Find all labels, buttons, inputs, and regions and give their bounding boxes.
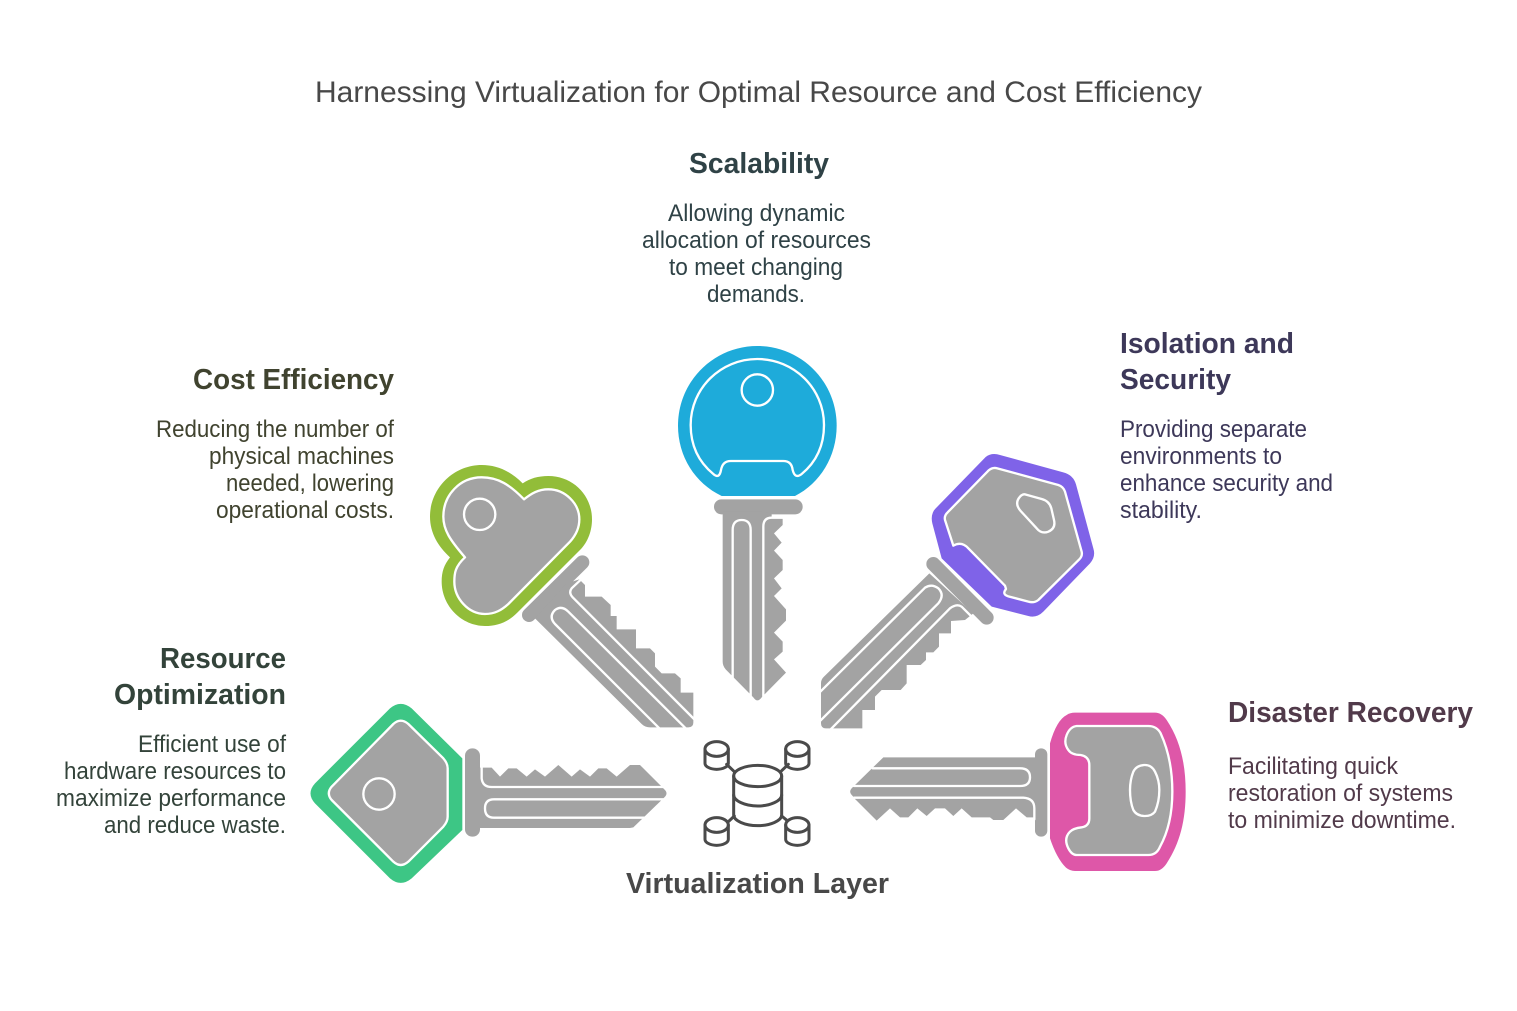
description: scalability: demands.: [707, 281, 805, 308]
label: virtualization layer: Virtualization Layer: [626, 868, 889, 900]
description: isolation and security: [1120, 416, 1333, 524]
description: disaster recovery: [1228, 753, 1456, 834]
heading: scalability: Scalability: [689, 148, 829, 180]
panel: isolation and security text: [1120, 328, 1333, 524]
panel: disaster recovery text: [1228, 697, 1473, 834]
description: isolation and security: enhance security and: [1120, 470, 1333, 497]
description: cost efficiency: [156, 416, 394, 524]
description: cost efficiency: operational costs.: [216, 497, 394, 524]
description: cost efficiency: Reducing the number of: [156, 416, 394, 443]
icon: blue key (scalability): [678, 346, 837, 700]
description: disaster recovery: restoration of systems: [1228, 780, 1453, 807]
title: Harnessing Virtualization for Optimal Resource and Cost Efficiency: [315, 76, 1202, 109]
icon: purple key (isolation and security): [820, 454, 1094, 731]
heading: disaster recovery: Disaster Recovery: [1228, 697, 1473, 729]
description: resource optimization: maximize performance: [56, 785, 286, 812]
heading: isolation and security: Security: [1120, 364, 1231, 396]
description: disaster recovery: Facilitating quick: [1228, 753, 1399, 780]
heading: cost efficiency: Cost Efficiency: [193, 364, 394, 396]
heading: resource optimization: [114, 643, 286, 711]
description: resource optimization: [56, 731, 286, 839]
description: resource optimization: Efficient use of: [138, 731, 286, 758]
heading: resource optimization: Resource: [160, 643, 286, 675]
description: cost efficiency: physical machines: [209, 443, 394, 470]
icon: pink key (disaster recovery): [850, 713, 1186, 871]
description: isolation and security: environments to: [1120, 443, 1282, 470]
description: scalability: [642, 200, 871, 308]
panel: resource optimization text: [56, 643, 286, 839]
heading: isolation and security: Isolation and: [1120, 328, 1294, 360]
description: scalability: to meet changing: [669, 254, 843, 281]
description: scalability: allocation of resources: [642, 227, 871, 254]
description: disaster recovery: to minimize downtime.: [1228, 807, 1456, 834]
panel: scalability text: [642, 148, 871, 308]
description: resource optimization: hardware resources to: [64, 758, 286, 785]
description: isolation and security: stability.: [1120, 497, 1202, 524]
heading: isolation and security: [1120, 328, 1294, 396]
panel: cost efficiency text: [156, 364, 394, 524]
description: cost efficiency: needed, lowering: [226, 470, 394, 497]
heading: resource optimization: Optimization: [114, 679, 286, 711]
description: resource optimization: and reduce waste.: [104, 812, 286, 839]
icon: green key (resource optimization): [310, 704, 666, 883]
icon: lime key (cost efficiency): [430, 465, 694, 728]
description: isolation and security: Providing separate: [1120, 416, 1307, 443]
icon: virtualization database hub: [705, 742, 809, 845]
description: scalability: Allowing dynamic: [668, 200, 845, 227]
